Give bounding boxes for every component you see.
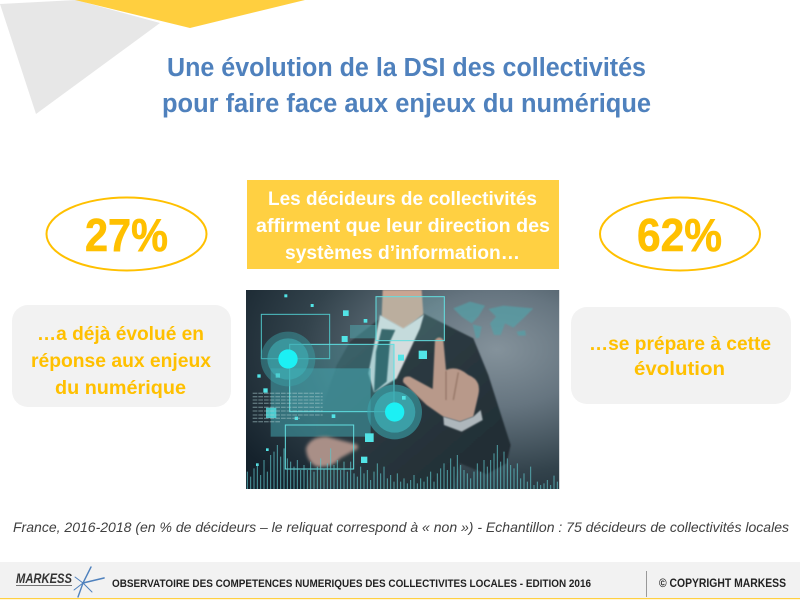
target circle right [367, 385, 422, 439]
panel: a déjà évolué [12, 305, 231, 407]
intro box [247, 180, 559, 269]
text lines in panel [253, 393, 323, 422]
interface frames [261, 297, 444, 469]
neck and chin [382, 290, 423, 330]
copyright: © COPYRIGHT MARKESS [659, 578, 786, 590]
title: pour faire face aux enjeux du numérique [162, 90, 651, 118]
footer band [0, 562, 800, 599]
panel: se prépare: …se prépare à cette [589, 334, 771, 355]
cuff [443, 410, 483, 432]
translucent screen panels [271, 368, 371, 437]
bar chart [247, 445, 557, 489]
pointing hand [403, 337, 479, 422]
stat: 27%: 27% [85, 209, 168, 261]
footer divider [646, 571, 647, 597]
tie [374, 329, 395, 392]
source note: France, 2016-2018 (en % de décideurs – le reliquat correspond à « non ») - Echantillon : 75 décideurs de collectivités locales [13, 519, 789, 535]
logo text: MARKESS [16, 571, 72, 586]
shirt [368, 314, 424, 392]
stat: 62%: 62% [637, 209, 722, 261]
decorative grey triangle [0, 0, 160, 114]
panel: se prépare [571, 307, 791, 404]
intro box: systèmes d’information… [285, 243, 520, 264]
panel: a déjà évolué: réponse aux enjeux [31, 351, 211, 372]
decorative yellow banner [75, 0, 305, 28]
panel: se prépare: évolution [634, 359, 725, 380]
world map [453, 302, 533, 338]
title: Une évolution de la DSI des collectivités [167, 54, 646, 82]
suit [307, 313, 511, 489]
stat: 62% [600, 198, 760, 270]
logo star [74, 567, 104, 597]
stat: 27% [46, 198, 206, 270]
intro box: Les décideurs de collectivités [268, 189, 537, 210]
floating squares [256, 294, 427, 466]
intro box: affirment que leur direction des [256, 216, 550, 237]
footer title: OBSERVATOIRE DES COMPETENCES NUMERIQUES DES COLLECTIVITES LOCALES - EDITION 2016 [112, 578, 591, 590]
photo: businessman touching a digital interface [246, 290, 559, 489]
finger shadow [446, 371, 458, 400]
title [162, 54, 651, 118]
panel: a déjà évolué: du numérique [55, 378, 186, 399]
panel: a déjà évolué: …a déjà évolué en [37, 324, 204, 345]
lower blurred hand [306, 437, 358, 467]
target circle left [261, 332, 315, 386]
